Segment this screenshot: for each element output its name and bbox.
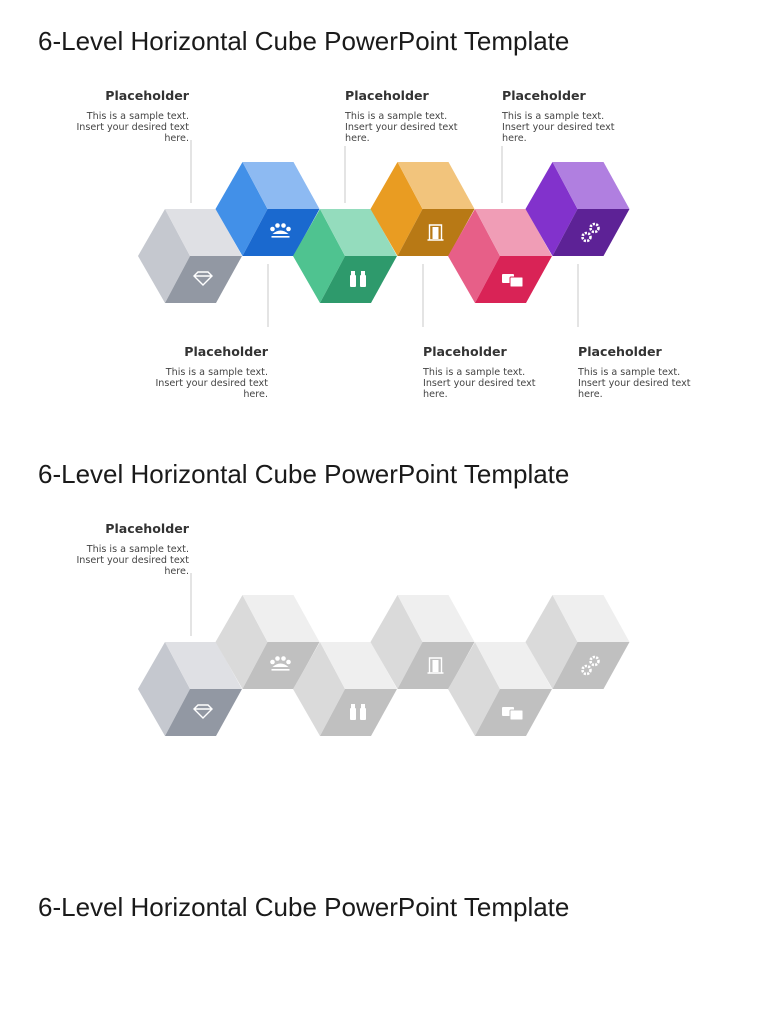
label 2 (bottom) [155,264,269,400]
label 2 (bottom): here. [243,389,268,400]
diagram 2: step 1 highlighted [138,595,630,736]
label 1 (top left) [76,88,191,203]
label 2 (bottom): Insert your desired text [155,378,268,389]
diagram 1: colored cubes [138,162,630,303]
label 4 (bottom) [422,264,536,400]
cube 3 green [293,209,397,303]
label 4 (bottom): here. [423,389,448,400]
label 3 (top): Placeholder [345,88,430,103]
cube 2 faded [216,595,320,689]
label 1 (diagram 2): Insert your desired text [76,555,189,566]
icon: binoculars [350,271,366,287]
label 3 (top): Insert your desired text [345,122,458,133]
label 6 (bottom): Placeholder [578,344,663,359]
label 1 (diagram 2): This is a sample text. [86,544,189,555]
label 1 (top left): Placeholder [105,88,190,103]
cube 4 orange [370,162,474,256]
label 5 (top): Insert your desired text [502,122,615,133]
title 1: 6-Level Horizontal Cube PowerPoint Template [38,26,569,56]
label 3 (top): This is a sample text. [344,111,447,122]
icon: gears [582,224,598,241]
cube 3 faded [293,642,397,736]
label 2 (bottom): Placeholder [184,344,269,359]
icon: chat [502,274,523,287]
icon: diamond [194,272,212,285]
icon: meeting [270,223,291,238]
label 4 (bottom): Placeholder [423,344,508,359]
label 6 (bottom): here. [578,389,603,400]
cube 5 pink [448,209,552,303]
cube 1 grey [138,209,242,303]
label 5 (top): Placeholder [502,88,587,103]
label 1 (diagram 2): here. [164,566,189,577]
cube 6 purple [526,162,630,256]
cube 2 blue [216,162,320,256]
label 2 (bottom): This is a sample text. [165,367,268,378]
cube 1 grey highlighted [138,642,242,736]
label 5 (top) [501,88,615,203]
label 5 (top): This is a sample text. [501,111,604,122]
label 3 (top): here. [345,133,370,144]
label 4 (bottom): Insert your desired text [423,378,536,389]
label 3 (top) [344,88,458,203]
title 2: 6-Level Horizontal Cube PowerPoint Template [38,459,569,489]
cube 5 faded [448,642,552,736]
label 6 (bottom) [577,264,691,400]
cube 4 faded [370,595,474,689]
title 3: 6-Level Horizontal Cube PowerPoint Template [38,892,569,922]
label 6 (bottom): Insert your desired text [578,378,691,389]
label 5 (top): here. [502,133,527,144]
label 4 (bottom): This is a sample text. [422,367,525,378]
label 1 (top left): Insert your desired text [76,122,189,133]
label 6 (bottom): This is a sample text. [577,367,680,378]
icon: door [428,225,444,240]
label 1 (diagram 2): Placeholder [105,521,190,536]
label 1 (top left): here. [164,133,189,144]
cube 6 faded [526,595,630,689]
label 1 (top left): This is a sample text. [86,111,189,122]
label 1 (diagram 2) [76,521,191,636]
